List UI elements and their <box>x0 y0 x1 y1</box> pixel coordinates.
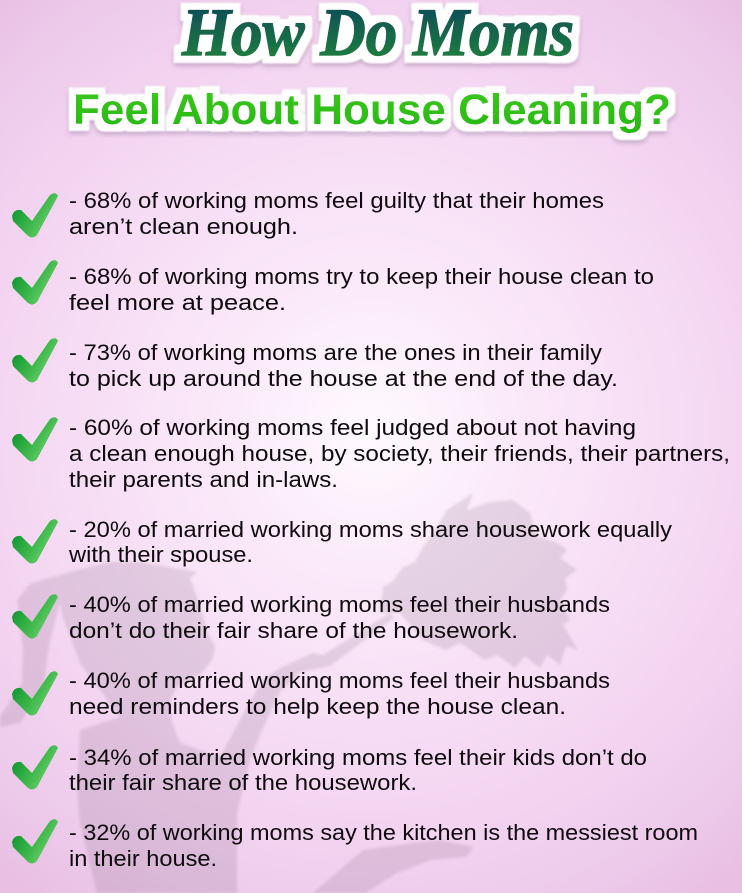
list item 6 <box>12 592 610 643</box>
silhouette: woman with feather duster <box>0 493 578 893</box>
icon: check mark 8 <box>12 745 58 790</box>
text 3: to pick up around the house at the end of the day. <box>69 366 618 391</box>
list item 3 <box>12 338 618 391</box>
icon: check mark 2 <box>12 260 58 304</box>
text 3: - 73% of working moms are the ones in their family <box>69 340 603 365</box>
text 1: aren’t clean enough. <box>69 214 298 239</box>
list item 1 <box>12 188 604 239</box>
text 5: - 20% of married working moms share housework equally <box>69 517 673 542</box>
text 4: - 60% of working moms feel judged about not having <box>69 415 636 440</box>
subtitle: Feel About House Cleaning?: Feel About House Cleaning? <box>73 86 671 134</box>
text 2: - 68% of working moms try to keep their house clean to <box>69 264 654 289</box>
list item 8 <box>12 745 647 795</box>
icon: check mark 4 <box>12 417 58 462</box>
icon: check mark 6 <box>12 594 58 638</box>
icon: check mark 9 <box>12 819 58 864</box>
list item 5 <box>12 517 673 567</box>
text 8: their fair share of the housework. <box>69 770 417 795</box>
list item 2 <box>12 260 654 315</box>
text 2: feel more at peace. <box>69 290 286 315</box>
text 6: don’t do their fair share of the housework. <box>69 618 518 643</box>
text 9: in their house. <box>69 846 217 871</box>
text 9: - 32% of working moms say the kitchen is the messiest room <box>69 820 698 845</box>
list item 7 <box>12 668 610 719</box>
text 8: - 34% of married working moms feel their kids don’t do <box>69 745 647 770</box>
list item 9 <box>12 819 698 871</box>
text 7: - 40% of married working moms feel their husbands <box>69 668 610 693</box>
text 6: - 40% of married working moms feel their husbands <box>69 592 610 617</box>
icon: check mark 1 <box>12 193 58 238</box>
text 1: - 68% of working moms feel guilty that their homes <box>69 188 604 213</box>
text 4: a clean enough house, by society, their friends, their partners, <box>69 441 730 466</box>
icon: check mark 5 <box>12 519 58 564</box>
text 4: their parents and in-laws. <box>69 467 338 492</box>
text 7: need reminders to help keep the house clean. <box>69 694 566 719</box>
text 5: with their spouse. <box>68 542 253 567</box>
icon: check mark 3 <box>12 338 58 382</box>
list item 4 <box>12 415 730 492</box>
icon: check mark 7 <box>12 671 58 716</box>
